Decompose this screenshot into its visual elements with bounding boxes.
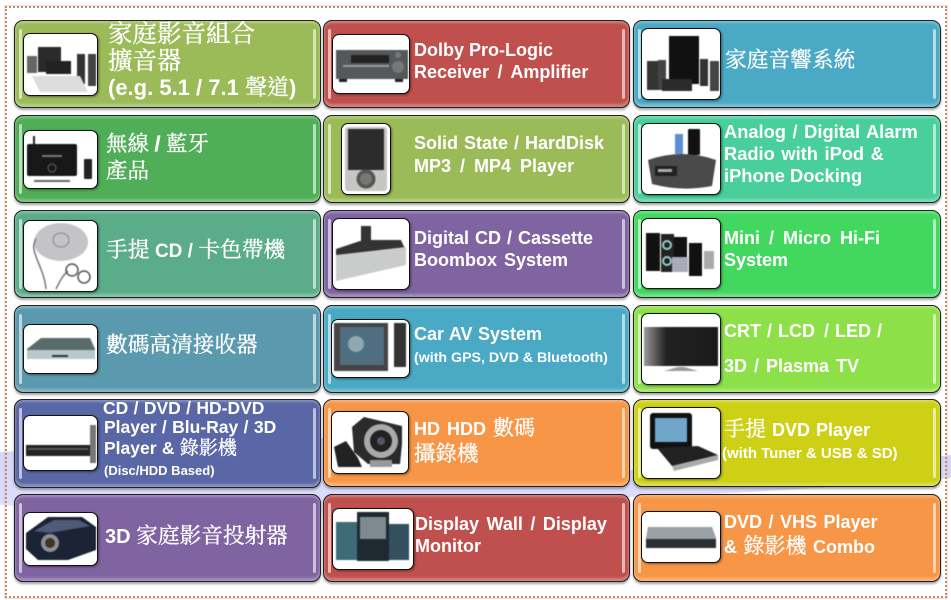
- text: MP3 / MP4 Player: [414, 156, 574, 176]
- icon: hi-fi: [641, 218, 721, 289]
- text: [724, 512, 878, 560]
- text: Player & 錄影機: [104, 433, 237, 460]
- text: Solid State / HardDisk: [414, 133, 604, 153]
- text: Receiver / Amplifier: [414, 62, 588, 82]
- card: car AV: [323, 305, 630, 393]
- card: portable CD cassette: [14, 210, 321, 298]
- text: (with Tuner & USB & SD): [722, 445, 898, 462]
- text: (with GPS, DVD & Bluetooth): [414, 350, 608, 366]
- icon: portable DVD: [641, 407, 721, 479]
- text: 數碼高清接收器: [106, 328, 258, 359]
- text: 家庭影音組合: [108, 15, 255, 50]
- card: MP3 player: [323, 115, 630, 203]
- text: (e.g. 5.1 / 7.1 聲道): [108, 71, 296, 102]
- text: [724, 228, 880, 270]
- icon: display wall: [332, 508, 414, 570]
- text: Car AV System: [414, 324, 542, 344]
- text: 手提 DVD Player: [724, 413, 870, 443]
- card: camcorder: [323, 399, 630, 487]
- text: & 錄影機 Combo: [724, 530, 875, 560]
- text: Player / Blu-Ray / 3D: [104, 417, 276, 437]
- text: (Disc/HDD Based): [104, 463, 215, 478]
- text: [414, 412, 535, 468]
- text: Digital CD / Cassette: [414, 228, 593, 248]
- text: [415, 514, 607, 556]
- card: portable DVD: [633, 399, 941, 487]
- text: 3D / Plasma TV: [724, 356, 859, 376]
- text: 產品: [106, 154, 149, 185]
- icon: boombox: [332, 218, 410, 290]
- text: [722, 413, 898, 462]
- icon: projector: [23, 512, 98, 566]
- icon: TV: [641, 313, 721, 385]
- text: [414, 133, 604, 176]
- card: DVD VHS combo: [633, 494, 941, 582]
- text: [414, 40, 588, 82]
- text: iPhone Docking: [724, 165, 862, 186]
- text: CRT / LCD / LED /: [724, 321, 882, 341]
- card: Dolby receiver: [323, 20, 630, 108]
- text: Dolby Pro-Logic: [414, 40, 553, 60]
- icon: receiver: [332, 34, 410, 94]
- card: display wall: [323, 494, 630, 582]
- icon: CD player: [23, 220, 98, 292]
- text: 攝錄機: [414, 437, 479, 468]
- card: wireless bluetooth: [14, 115, 321, 203]
- text: [724, 321, 882, 376]
- card: digital receiver: [14, 305, 321, 393]
- text: Mini / Micro Hi-Fi: [724, 228, 880, 248]
- card: mini hi-fi: [633, 210, 941, 298]
- text: 手提 CD / 卡色帶機: [106, 233, 285, 264]
- icon: car AV: [331, 319, 410, 378]
- card: boombox: [323, 210, 630, 298]
- text: [414, 324, 608, 366]
- text: [108, 15, 296, 102]
- text: Monitor: [415, 536, 481, 556]
- card: alarm radio dock: [633, 115, 941, 203]
- icon: camcorder: [331, 411, 409, 474]
- text: System: [724, 250, 788, 270]
- text: 家庭音響系統: [725, 43, 855, 74]
- text: Radio with iPod &: [724, 143, 884, 164]
- text: DVD / VHS Player: [724, 512, 878, 532]
- text: Analog / Digital Alarm: [724, 121, 918, 142]
- icon: clock radio: [641, 123, 721, 195]
- text: HD HDD 數碼: [414, 412, 535, 442]
- text: Boombox System: [414, 250, 568, 270]
- card: 3D projector: [14, 494, 321, 582]
- text: [414, 228, 593, 270]
- card: home theatre set: [14, 20, 321, 108]
- icon: wireless unit: [23, 130, 98, 189]
- icon: home speakers: [641, 28, 721, 100]
- text: 3D 家庭影音投射器: [105, 519, 288, 550]
- icon: DVD VHS combo: [641, 511, 721, 563]
- icon: disc recorder: [23, 415, 98, 471]
- text: 無線 / 藍牙: [106, 127, 209, 158]
- text: CD / DVD / HD-DVD: [103, 398, 264, 418]
- text: Display Wall / Display: [415, 514, 607, 534]
- icon: speaker set: [23, 33, 98, 96]
- icon: media player: [341, 123, 391, 195]
- text: [106, 127, 209, 185]
- text: [724, 121, 918, 186]
- card: disc player: [14, 399, 321, 488]
- card: home audio system: [633, 20, 941, 108]
- text: 擴音器: [108, 42, 182, 77]
- icon: set-top box: [23, 324, 98, 374]
- card: TV: [633, 305, 941, 393]
- text: [103, 398, 276, 478]
